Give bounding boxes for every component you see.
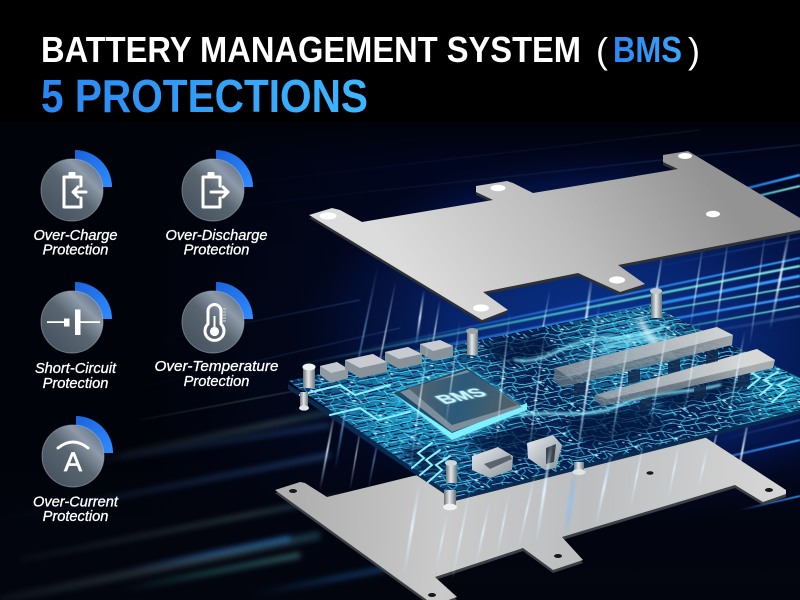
energy glow traces <box>300 320 792 482</box>
item: over-charge protection <box>33 150 118 258</box>
metal brackets <box>472 435 562 478</box>
closing bracket: ) <box>688 30 700 71</box>
icon: battery discharging out <box>182 150 253 221</box>
icon: thermometer <box>182 282 253 353</box>
label: Over-Charge <box>33 228 118 244</box>
label: Protection <box>43 376 108 392</box>
bottom metal plate <box>275 432 786 600</box>
rear light beams <box>320 228 790 490</box>
title line 2: 5 PROTECTIONS <box>41 70 368 122</box>
label: Protection <box>43 509 108 525</box>
top metal plate <box>309 151 800 323</box>
icon: ammeter A: A <box>64 447 82 477</box>
item: over-temperature protection <box>154 282 278 390</box>
metal heat-sink rails <box>553 327 775 412</box>
capacitor blocks <box>320 340 453 383</box>
BMS chip: BMS <box>431 386 493 407</box>
icon: short circuit symbol <box>41 282 112 353</box>
label: Over-Temperature <box>154 359 278 375</box>
front light beams <box>335 300 745 580</box>
item: over-discharge protection <box>166 150 267 258</box>
label: Protection <box>184 374 249 390</box>
BMS highlight: BMS <box>613 29 682 70</box>
icon: battery charging in <box>41 150 112 221</box>
label: Over-Discharge <box>166 228 267 244</box>
label: Protection <box>43 242 108 258</box>
opening bracket: ( <box>596 30 608 71</box>
title line 1: BATTERY MANAGEMENT SYSTEM <box>41 29 581 70</box>
item: short-circuit protection <box>35 282 117 392</box>
dark board patches <box>400 335 745 475</box>
plate mounting holes <box>289 471 773 597</box>
label: Protection <box>184 242 249 258</box>
background light streaks <box>0 130 800 600</box>
circuit board <box>288 288 800 510</box>
label: Over-Current <box>33 494 119 510</box>
plate mounting holes <box>320 153 720 312</box>
title <box>41 29 700 122</box>
label: Short-Circuit <box>35 361 117 377</box>
BMS chip <box>393 368 527 440</box>
item: over-current protection <box>33 416 119 525</box>
standoffs <box>299 288 662 510</box>
